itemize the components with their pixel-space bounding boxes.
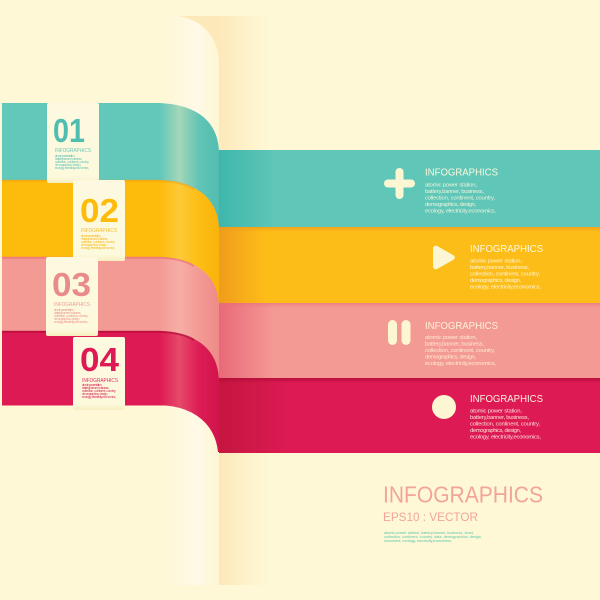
card 02 text: battery,banner, business, — [81, 237, 108, 241]
band 3 text — [425, 320, 498, 367]
footer text: atomic power station, battery,banner, business, chart, — [384, 531, 474, 535]
number 01: 01 — [53, 112, 85, 149]
subtitle: EPS10 : VECTOR — [383, 510, 478, 524]
card 04 text: atomic power station, — [82, 383, 102, 387]
band 2 text: INFOGRAPHICS — [470, 243, 543, 255]
band 2 text: collection, continent, country, — [470, 272, 540, 278]
card 04 text: collection, continent, country, — [82, 389, 116, 393]
back panel shadow — [175, 16, 270, 585]
number 04: 04 — [80, 341, 120, 378]
band 4 text: battery,banner, business, — [470, 415, 529, 421]
band 4 text: collection, continent, country, — [470, 422, 540, 428]
band 1 text: collection, continent, country, — [425, 196, 495, 202]
card 01 text: ecology, electricity,economics, — [55, 166, 89, 170]
card 03 text — [54, 302, 90, 324]
card 02 text: atomic power station, — [81, 234, 101, 238]
card 02 text — [81, 228, 117, 250]
card 01 text: INFOGRAPHICS — [55, 148, 91, 154]
card 01 text: collection, continent, country, — [55, 160, 89, 164]
card 04 — [73, 337, 125, 410]
band 3 text: ecology, electricity,economics, — [425, 361, 496, 367]
icon: play — [433, 246, 455, 269]
left band: teal — [2, 103, 219, 230]
card 02 text: demographics, design, — [81, 243, 107, 247]
right band: yellow — [219, 227, 600, 303]
band 1 text: INFOGRAPHICS — [425, 167, 498, 179]
footer text — [384, 531, 482, 543]
card 02 text: ecology, electricity,economics, — [81, 246, 115, 250]
card 01 text — [55, 148, 91, 170]
footer text: collection, continent, country, data, demographics, design, — [384, 535, 482, 539]
band 3 text: demographics, design, — [425, 354, 476, 360]
band 4 text: ecology, electricity,economics, — [470, 434, 541, 440]
band 4 text: demographics, design, — [470, 428, 521, 434]
card 03 text: collection, continent, country, — [54, 314, 88, 318]
card 04 text: ecology, electricity,economics, — [82, 395, 116, 399]
icon: circle — [432, 395, 456, 419]
card 02 text: INFOGRAPHICS — [81, 228, 117, 234]
band 3 text: battery,banner, business, — [425, 342, 484, 348]
band 1 text — [425, 167, 498, 214]
card 01 text: demographics, design, — [55, 163, 81, 167]
right band: pink — [219, 303, 600, 378]
card 04 text — [82, 378, 118, 399]
band 4 text — [470, 393, 543, 440]
title: INFOGRAPHICS — [383, 482, 543, 508]
card 02 — [73, 180, 125, 261]
band 3 text: atomic power station, — [425, 335, 477, 341]
band 2 text: ecology, electricity,economics, — [470, 284, 541, 290]
card 03 text: ecology, electricity,economics, — [54, 320, 88, 324]
icon: pause — [388, 320, 410, 345]
number 02: 02 — [80, 192, 119, 229]
band 2 text: demographics, design, — [470, 278, 521, 284]
card 03 text: demographics, design, — [54, 317, 80, 321]
icon: plus — [384, 168, 415, 199]
card 04 text: battery,banner, business, — [82, 386, 109, 390]
card 01 text: atomic power station, — [55, 154, 75, 158]
card 04 text: INFOGRAPHICS — [82, 378, 118, 384]
card 02 text: collection, continent, country, — [81, 240, 115, 244]
card 03 text: battery,banner, business, — [54, 311, 81, 315]
card 03 text: atomic power station, — [54, 308, 74, 312]
right band: crimson — [219, 378, 600, 453]
footer text: document, ecology, electricity,economics, — [384, 539, 452, 543]
left band: yellow — [2, 180, 219, 306]
cream page fold — [2, 15, 219, 585]
left band: pink — [2, 257, 219, 380]
band 1 text: ecology, electricity,economics, — [425, 208, 496, 214]
band 1 text: atomic power station, — [425, 182, 477, 188]
band 4 text: INFOGRAPHICS — [470, 393, 543, 405]
band 3 text: INFOGRAPHICS — [425, 320, 498, 332]
card 03 text: INFOGRAPHICS — [54, 302, 90, 308]
card 03 — [46, 257, 98, 336]
left band: crimson — [2, 331, 219, 452]
card 04 text: demographics, design, — [82, 392, 108, 396]
band 2 text — [470, 243, 543, 290]
band 3 text: collection, continent, country, — [425, 348, 495, 354]
band 4 text: atomic power station, — [470, 408, 522, 414]
number 03: 03 — [52, 266, 91, 303]
band 2 text: atomic power station, — [470, 258, 522, 264]
band 1 text: demographics, design, — [425, 202, 476, 208]
band 1 text: battery,banner, business, — [425, 189, 484, 195]
card 01 text: battery,banner, business, — [55, 157, 82, 161]
right band: teal — [219, 150, 600, 227]
card 01 — [47, 103, 99, 183]
band 2 text: battery,banner, business, — [470, 265, 529, 271]
